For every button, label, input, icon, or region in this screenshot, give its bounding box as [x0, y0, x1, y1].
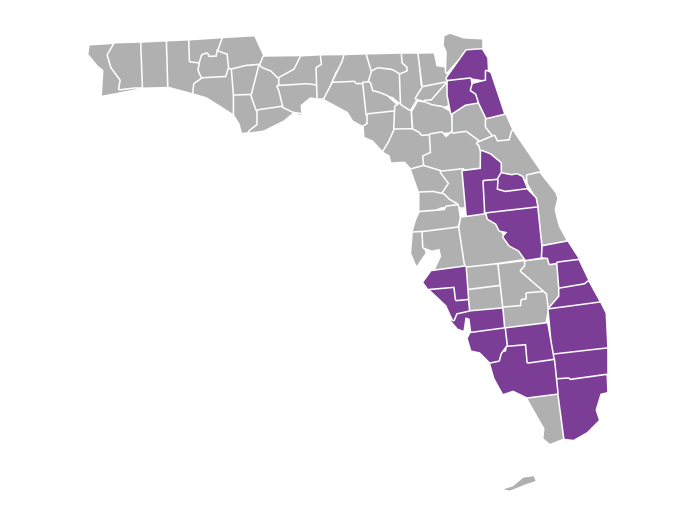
county: Franklin: [250, 107, 301, 132]
county: Madison: [334, 55, 371, 82]
county: Bradford: [425, 84, 447, 107]
county: Escambia: [89, 44, 136, 95]
county: Okaloosa: [142, 42, 168, 87]
county: Palm Beach: [549, 303, 607, 354]
county: Walton: [168, 41, 202, 93]
county: Leon: [280, 56, 323, 87]
county: DeSoto: [468, 287, 503, 311]
county: Miami-Dade: [557, 376, 607, 439]
county: Suwannee: [369, 69, 401, 103]
county: Putnam: [453, 103, 493, 140]
county: Calhoun: [233, 66, 258, 96]
county: Seminole: [497, 174, 527, 192]
county: Flagler: [487, 115, 512, 142]
county: Taylor: [325, 81, 367, 126]
county: St. Johns: [472, 72, 503, 117]
county: Columbia: [401, 54, 422, 109]
county: Gadsden: [261, 57, 300, 78]
county: Jackson: [219, 37, 263, 69]
county: Okeechobee: [522, 259, 559, 307]
county: Hendry: [506, 324, 553, 362]
county: Collier: [491, 344, 557, 397]
county: Polk: [460, 214, 525, 267]
county: Marion: [424, 128, 482, 172]
county: Highlands: [499, 262, 545, 307]
county: Gulf: [235, 96, 258, 132]
county: Holmes: [190, 39, 223, 62]
county: Gilchrist: [395, 104, 411, 129]
county: Lafayette: [364, 83, 396, 114]
county: Indian River: [543, 242, 578, 263]
county: Alachua: [413, 102, 452, 135]
county: Levy: [384, 130, 431, 170]
county: Osceola: [487, 208, 542, 259]
county: Pasco: [413, 206, 459, 232]
county: Orange: [484, 181, 537, 213]
county: Santa Rosa: [108, 43, 143, 88]
county: Manatee: [424, 267, 467, 299]
county: Martin: [550, 282, 599, 308]
county: Hernando: [420, 193, 457, 212]
county: Wakulla: [278, 85, 317, 112]
county: Monroe: [527, 393, 563, 443]
county: Florida Keys: [505, 477, 535, 490]
purple counties: [424, 50, 607, 439]
gray counties: [89, 34, 567, 490]
county: Citrus: [412, 167, 450, 193]
county: Baker: [419, 54, 447, 86]
county: Volusia: [478, 132, 540, 180]
county: Duval: [447, 50, 487, 80]
county: Liberty: [252, 66, 284, 110]
county: Broward: [554, 349, 607, 379]
county: Nassau: [444, 34, 482, 72]
county: Bay: [194, 70, 234, 114]
county: Hamilton: [368, 54, 407, 75]
county: Charlotte: [452, 309, 503, 331]
county: Hillsborough: [423, 228, 465, 271]
county: Washington: [199, 51, 229, 78]
county: Sumter: [442, 170, 465, 207]
county: Clay: [448, 79, 478, 113]
county: Jefferson: [317, 56, 344, 98]
county: St. Lucie: [558, 261, 588, 288]
county: Pinellas: [412, 233, 425, 265]
county: Sarasota: [430, 287, 468, 319]
county: Union: [417, 83, 446, 102]
county: Lee: [468, 328, 506, 362]
county: Brevard: [528, 173, 567, 246]
county: Dixie: [364, 112, 393, 151]
county: Lake: [463, 152, 500, 215]
county: Hardee: [467, 265, 500, 290]
county: Glades: [504, 293, 547, 327]
